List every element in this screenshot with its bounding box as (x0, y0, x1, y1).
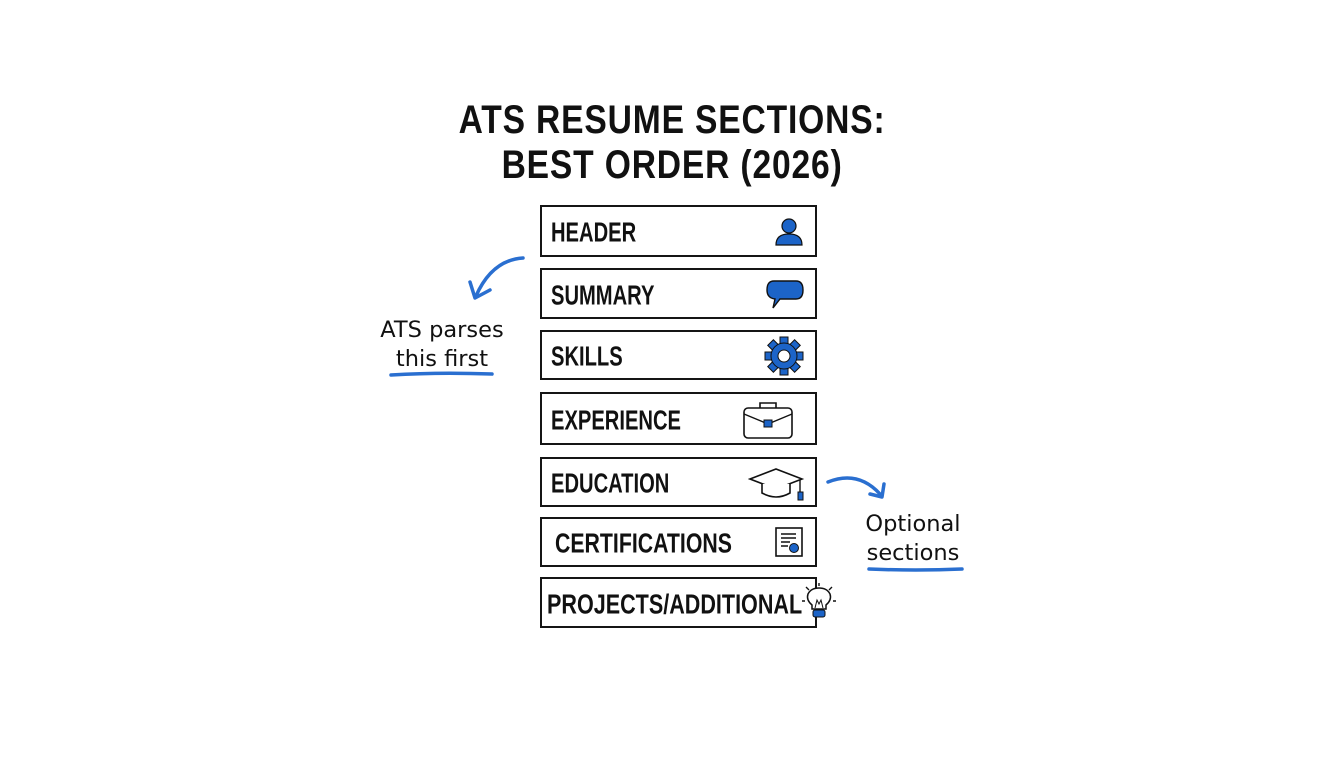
box: summary: SUMMARY (551, 279, 654, 310)
title: ATS RESUME SECTIONS: (459, 98, 885, 142)
underline right (867, 567, 964, 572)
title: BEST ORDER (2026) (501, 143, 843, 187)
box: experience (540, 392, 817, 445)
box: education: EDUCATION (551, 468, 669, 499)
callout: ATS parses this first: ATS parses (380, 317, 504, 343)
icon: graduation cap (748, 468, 804, 500)
callout: Optional sections (865, 511, 961, 566)
box: certifications: CERTIFICATIONS (555, 528, 732, 559)
callout: Optional sections: Optional (865, 511, 961, 537)
icon: certificate (775, 527, 803, 557)
box: certifications (540, 517, 817, 567)
icon: speech bubble (766, 280, 804, 308)
callout: Optional sections: sections (867, 540, 959, 566)
icon: gear (764, 336, 804, 376)
box: summary (540, 268, 817, 319)
box: skills: SKILLS (551, 341, 623, 372)
arrow: left (468, 256, 525, 300)
title (459, 98, 885, 187)
box: experience: EXPERIENCE (551, 404, 681, 435)
icon: briefcase (743, 402, 793, 439)
box: education (540, 457, 817, 507)
callout: ATS parses this first: this first (396, 346, 488, 372)
icon: lightbulb (802, 583, 836, 618)
box: header: HEADER (551, 217, 636, 248)
box: skills (540, 330, 817, 380)
arrow: right (826, 476, 886, 499)
callout: ATS parses this first (380, 317, 504, 372)
box: projects/additional (540, 577, 817, 628)
box: projects/additional: PROJECTS/ADDITIONAL (547, 588, 802, 619)
icon: person (775, 218, 803, 246)
box: header (540, 205, 817, 257)
underline left (389, 372, 494, 377)
